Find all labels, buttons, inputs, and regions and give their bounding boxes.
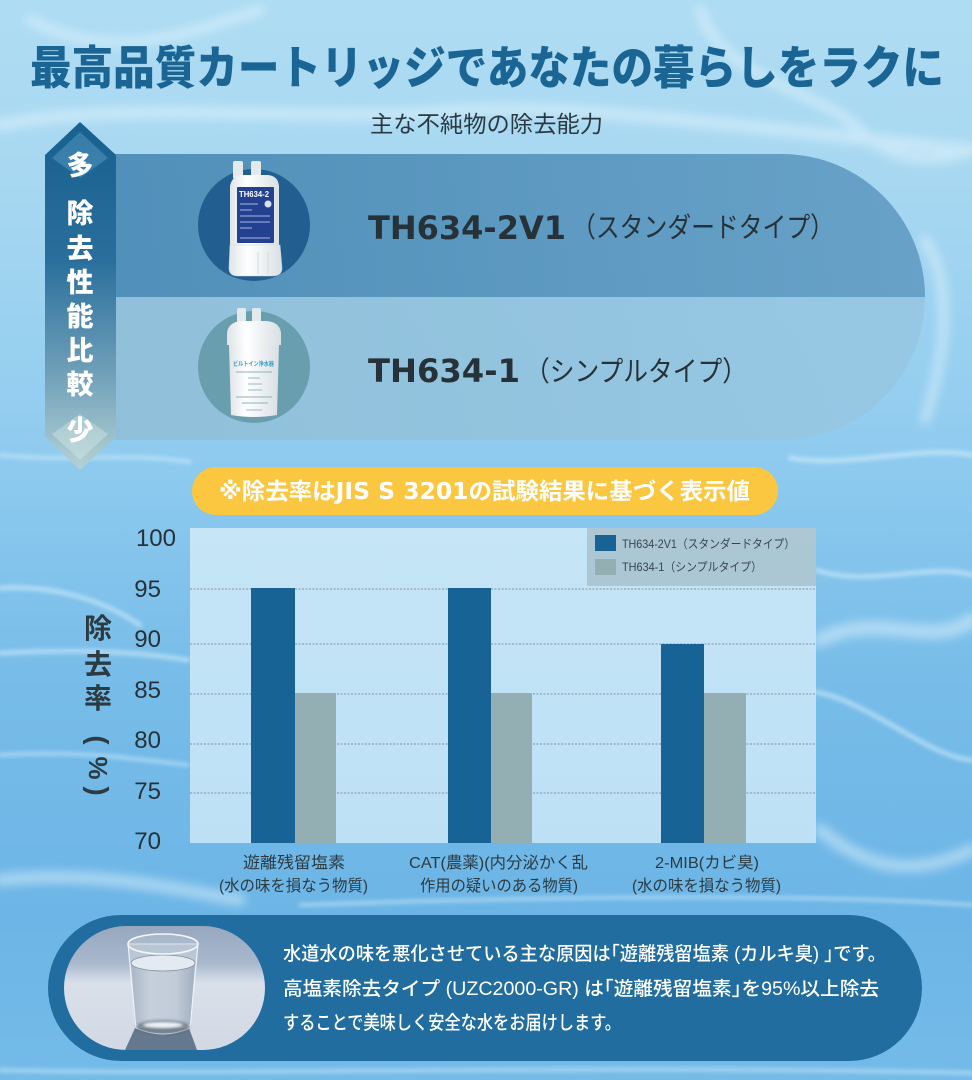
ribbon: removal performance scale: 少	[66, 416, 94, 446]
ribbon: removal performance scale: 比	[66, 336, 94, 366]
y axis title: %	[83, 756, 113, 780]
ribbon: removal performance scale: 去	[66, 234, 94, 264]
ribbon: removal performance scale: 能	[66, 302, 94, 332]
y axis numbers: 100	[136, 525, 176, 552]
explanation text	[283, 943, 886, 1034]
bars: CAT	[448, 588, 532, 843]
y axis numbers: 90	[134, 626, 161, 653]
explanation text: 高塩素除去タイプ (UZC2000-GR) は｢遊離残留塩素｣を95%以上除去	[283, 978, 879, 1000]
icon: simple cartridge: ビルトイン浄水器	[233, 359, 275, 368]
legend: TH634-1（シンプルタイプ）	[622, 560, 762, 574]
category labels: 作用の疑いのある物質)	[420, 877, 578, 895]
subtitle: 主な不純物の除去能力	[370, 105, 603, 139]
y axis numbers: 70	[134, 828, 161, 855]
y axis numbers: 75	[134, 778, 161, 805]
legend	[587, 528, 816, 586]
y axis title: 率	[84, 683, 112, 714]
icon: standard cartridge: TH634-2	[239, 190, 270, 199]
ribbon: removal performance scale: 性	[66, 268, 94, 298]
y axis title: (	[83, 735, 114, 745]
panel: product comparison	[115, 154, 925, 440]
ribbon: removal performance scale	[45, 122, 116, 470]
icon: simple cartridge	[198, 308, 310, 423]
label: TH634-1: （シンプルタイプ）	[525, 350, 747, 390]
legend: TH634-2V1（スタンダードタイプ）	[622, 536, 795, 551]
label: TH634-2V1: TH634-2V1	[368, 209, 566, 247]
category labels: 2-MIB(カビ臭)	[655, 854, 759, 872]
y axis numbers: 85	[134, 677, 161, 704]
label: TH634-1	[368, 350, 747, 390]
label: TH634-2V1: （スタンダードタイプ）	[572, 206, 834, 246]
notice pill	[192, 467, 778, 515]
bar chart	[83, 525, 816, 895]
category labels: (水の味を損なう物質)	[632, 877, 781, 895]
y axis title: 除	[84, 613, 112, 644]
ribbon: removal performance scale: 多	[66, 151, 94, 181]
photo: glass of water	[64, 926, 265, 1050]
category labels	[219, 854, 781, 895]
label: TH634-2V1	[368, 206, 834, 247]
bars: 2-MIB	[661, 644, 746, 843]
y axis numbers	[134, 525, 176, 855]
bars: free residual chlorine	[251, 588, 336, 843]
band: standard type	[115, 154, 925, 297]
band: simple type	[115, 297, 925, 440]
y axis title	[83, 613, 114, 796]
category labels: 遊離残留塩素	[243, 854, 345, 872]
y axis title: )	[83, 786, 114, 796]
explanation text: することで美味しく安全な水をお届けします。	[283, 1012, 621, 1034]
label: TH634-1: TH634-1	[368, 352, 520, 390]
plot area	[190, 528, 816, 843]
y axis numbers: 95	[134, 576, 161, 603]
icon: standard cartridge	[198, 161, 310, 281]
explanation text: 水道水の味を悪化させている主な原因は｢遊離残留塩素 (カルキ臭) ｣です。	[283, 943, 886, 965]
notice pill: ※除去率はJIS S 3201の試験結果に基づく表示値	[219, 479, 750, 505]
category labels: CAT(農薬)(内分泌かく乱	[409, 854, 588, 872]
y axis title: 去	[84, 649, 112, 680]
y axis numbers: 80	[134, 727, 161, 754]
ribbon: removal performance scale: 較	[66, 370, 94, 400]
panel: explanation	[48, 915, 922, 1061]
ribbon: removal performance scale: 除	[66, 199, 94, 229]
category labels: (水の味を損なう物質)	[219, 877, 368, 895]
